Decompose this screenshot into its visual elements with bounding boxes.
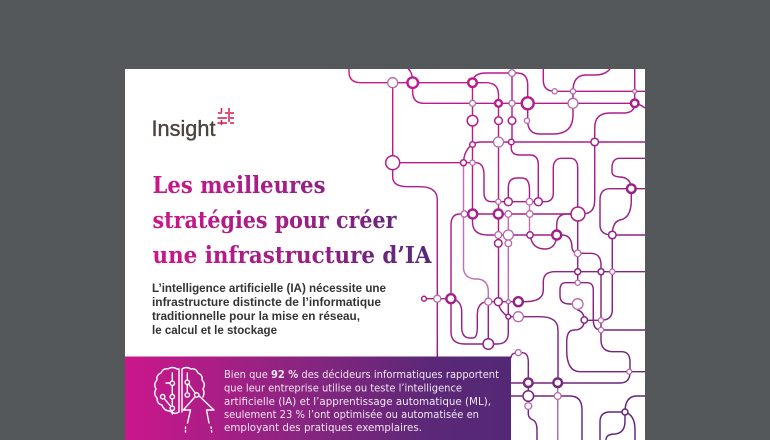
callout text	[224, 369, 499, 434]
subtitle: le calcul et le stockage	[152, 325, 277, 337]
logo: Insight: Insight	[152, 116, 216, 141]
icon: brain with arrow	[155, 368, 214, 434]
callout text: que leur entreprise utilise ou teste l’intelligence	[224, 382, 462, 394]
subtitle: traditionnelle pour la mise en réseau,	[152, 311, 360, 323]
callout text: employant des pratiques exemplaires.	[224, 422, 422, 434]
callout text: seulement 23 % l’ont optimisée ou automatisée en	[224, 409, 479, 421]
subtitle: L’intelligence artificielle (IA) nécessite une	[152, 283, 386, 295]
title	[152, 172, 433, 269]
logo mark	[218, 108, 234, 125]
callout text: artificielle (IA) et l’apprentissage automatique (ML),	[224, 396, 491, 408]
white page panel	[125, 69, 645, 440]
logo: Insight	[152, 108, 234, 141]
callout text: Bien que 92 % des décideurs informatiques rapportent	[224, 369, 499, 381]
title: stratégies pour créer	[152, 207, 397, 234]
subtitle: infrastructure distincte de l’informatique	[152, 297, 381, 309]
title: une infrastructure d’IA	[152, 242, 433, 269]
circuit network illustration	[349, 69, 645, 440]
callout panel	[125, 356, 511, 440]
subtitle	[152, 283, 386, 337]
title: Les meilleures	[152, 172, 326, 199]
